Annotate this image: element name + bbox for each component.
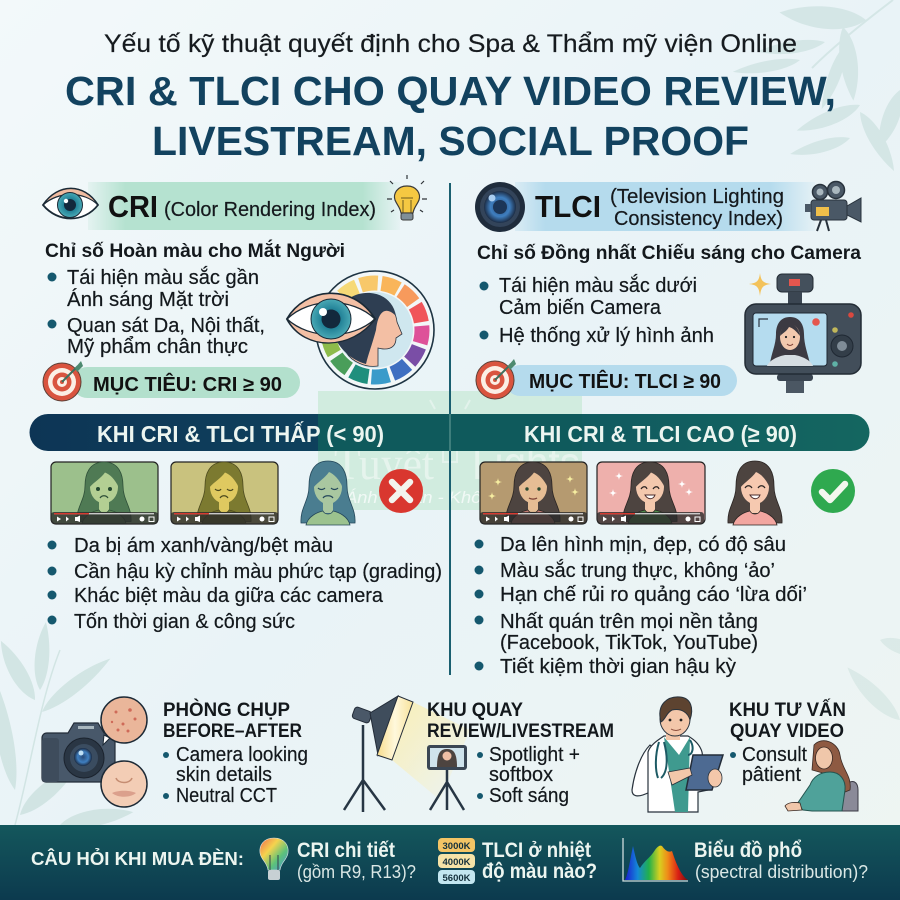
TLCI header pill (515, 182, 815, 231)
zone text: softbox (489, 764, 553, 786)
TLCI bullets: Hệ thống xử lý hình ảnh (499, 325, 714, 347)
chart: light spectrum (623, 838, 688, 881)
footer heading: CÂU HỎI KHI MUA ĐÈN: (31, 848, 244, 869)
icon: target (476, 359, 516, 399)
zone: consultation area (632, 697, 858, 812)
CRI target pill (72, 367, 300, 398)
TLCI full name: Consistency Index) (614, 208, 783, 230)
title block (65, 30, 836, 164)
question: CRI detail (297, 839, 416, 882)
TLCI bullets: Cảm biến Camera (499, 297, 662, 319)
zone text (427, 700, 614, 807)
zone text: KHU TƯ VẤN (729, 699, 846, 721)
CRI label: CRI (108, 189, 158, 224)
question: TLCI temperature (482, 839, 597, 883)
TLCI bullets (480, 274, 714, 347)
icon: target (43, 361, 83, 401)
TLCI label: TLCI (535, 189, 601, 224)
colour temperature chips: 4000K (442, 857, 471, 868)
decorative leaves top right (732, 0, 900, 174)
question: spectral distribution: Biểu đồ phổ (694, 839, 802, 862)
zone text: QUAY VIDEO (730, 721, 844, 742)
icon: light bulb (387, 175, 427, 220)
CRI header pill (88, 182, 400, 230)
watermark: Tuyệt (334, 438, 434, 489)
high bullets: Da lên hình mịn, đẹp, có độ sâu (500, 534, 786, 556)
subtitle: Yếu tố kỹ thuật quyết định cho Spa & Thẩm mỹ viện Online (104, 30, 797, 58)
low bullets: Da bị ám xanh/vàng/bệt màu (74, 535, 333, 557)
question: spectral distribution (694, 839, 868, 882)
icon: red cross (379, 469, 423, 513)
low bullets: Khác biệt màu da giữa các camera (74, 585, 384, 607)
zone text: Soft sáng (489, 785, 569, 807)
colour temperature chips: 5600K (442, 873, 471, 884)
CRI bullets: Tái hiện màu sắc gần (67, 266, 259, 289)
low banner (30, 414, 450, 451)
high banner (450, 414, 870, 451)
CRI bullets: Ánh sáng Mặt trời (67, 288, 229, 311)
watermark (318, 391, 582, 510)
zone text (163, 699, 308, 807)
panel: high CRI and TLCI (450, 414, 870, 678)
thumbnail: warm tone (480, 462, 587, 524)
thumbnail: natural glow (597, 462, 705, 524)
decorative leaves bottom right (841, 633, 900, 726)
question: spectral distribution: (spectral distribution)? (695, 862, 868, 882)
low banner: KHI CRI & TLCI THẤP (< 90) (97, 420, 384, 447)
illustration: seated patient (785, 741, 858, 811)
CRI bullets (48, 266, 265, 358)
zone text: REVIEW/LIVESTREAM (427, 721, 614, 742)
illustration: camera with woman on screen (745, 273, 861, 393)
TLCI target text: MỤC TIÊU: TLCI ≥ 90 (529, 369, 721, 393)
high bullets: Nhất quán trên mọi nền tảng (500, 611, 758, 633)
zone: before-after room (42, 697, 308, 807)
main title line 1: CRI & TLCI CHO QUAY VIDEO REVIEW, (65, 68, 836, 114)
icon: green check (811, 469, 855, 513)
zone text: Spotlight + (489, 744, 580, 766)
zone: review and livestream area (344, 696, 614, 812)
low bullets (48, 535, 442, 633)
portrait: dull skin (301, 461, 355, 525)
icon: rainbow bulb (260, 838, 288, 880)
high bullets: Màu sắc trung thực, không ‘ảo’ (500, 559, 775, 582)
TLCI target pill (505, 365, 737, 396)
watermark: Lights (472, 437, 580, 489)
CRI target text: MỤC TIÊU: CRI ≥ 90 (93, 372, 282, 396)
thumbnail: yellow cast (171, 462, 278, 524)
zone text: BEFORE–AFTER (163, 721, 302, 742)
illustration: doctor with tablet (632, 697, 723, 812)
high banner: KHI CRI & TLCI CAO (≥ 90) (524, 421, 797, 447)
main title line 2: LIVESTREAM, SOCIAL PROOF (152, 118, 749, 164)
CRI bullets: Quan sát Da, Nội thất, (67, 315, 265, 337)
watermark: Ánh chuẩn - Không gian thật (344, 488, 578, 507)
CRI subheading: Chỉ số Hoàn màu cho Mắt Người (45, 240, 345, 262)
colour temperature chips: 3000K (442, 841, 471, 852)
vertical divider (449, 183, 451, 675)
high bullets: (Facebook, TikTok, YouTube) (500, 632, 758, 654)
question: TLCI temperature: TLCI ở nhiệt (482, 839, 591, 862)
icon: video camera (805, 182, 861, 231)
zone text: KHU QUAY (427, 700, 523, 721)
TLCI bullets: Tái hiện màu sắc dưới (499, 274, 697, 297)
zone text: Consult (742, 744, 807, 766)
high bullets (474, 534, 807, 678)
zone text: skin details (176, 764, 272, 786)
portrait: natural skin (728, 461, 782, 525)
low bullets: Tốn thời gian & công sức (74, 611, 295, 633)
question: CRI detail: CRI chi tiết (297, 839, 395, 862)
zone text: Neutral CCT (176, 785, 277, 807)
panel: low CRI and TLCI (30, 414, 450, 633)
icon: eye (43, 188, 98, 218)
zone text: pâtient (742, 764, 801, 786)
zone text (729, 699, 846, 786)
colour temperature chips (438, 838, 475, 884)
low bullets: Cần hậu kỳ chỉnh màu phức tạp (grading) (74, 561, 442, 583)
icon: softbox light and phone on tripod (344, 696, 470, 812)
illustration: colour wheel with face and eye (287, 264, 441, 396)
zone text: Camera looking (176, 744, 308, 766)
footer: buying questions (0, 825, 900, 900)
question: CRI detail: (gồm R9, R13)? (297, 862, 416, 882)
panel: TLCI (475, 182, 861, 399)
footer background (0, 825, 900, 900)
high bullets: Tiết kiệm thời gian hậu kỳ (500, 656, 736, 678)
icon: camera lens (475, 182, 525, 232)
TLCI subheading: Chỉ số Đồng nhất Chiếu sáng cho Camera (477, 243, 861, 264)
decorative leaves bottom left (0, 621, 135, 832)
TLCI full name: (Television Lighting (610, 186, 784, 208)
thumbnail: green cast (51, 462, 158, 524)
panel: CRI (43, 175, 441, 401)
question: TLCI temperature: độ màu nào? (482, 860, 597, 883)
CRI bullets: Mỹ phẩm chân thực (67, 336, 248, 358)
icon: camera with skin close-ups (42, 697, 147, 807)
high bullets: Hạn chế rủi ro quảng cáo ‘lừa dối’ (500, 584, 807, 606)
TLCI full name (610, 186, 784, 230)
zone text: PHÒNG CHỤP (163, 699, 290, 721)
CRI full name: (Color Rendering Index) (164, 199, 376, 221)
